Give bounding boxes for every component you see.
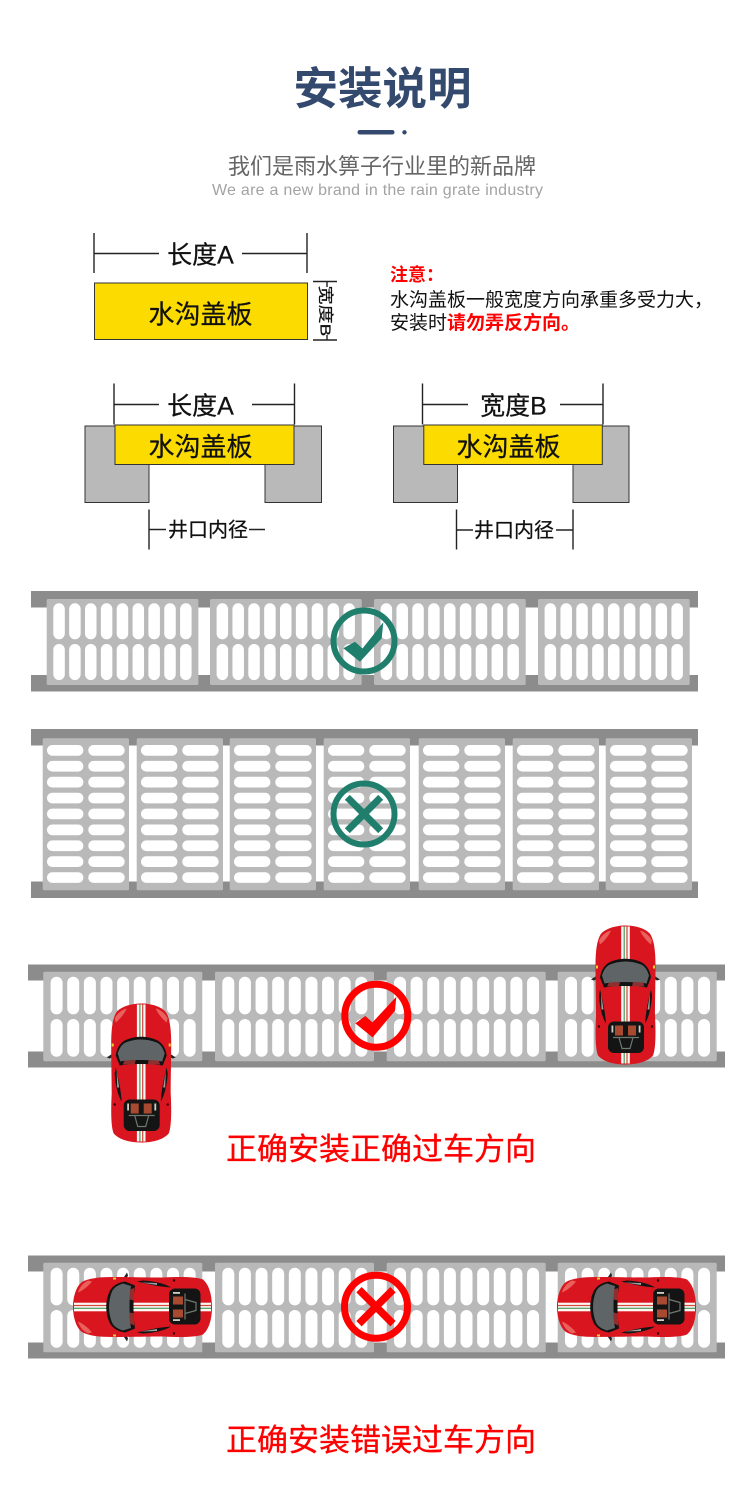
icon: red check <box>345 984 408 1047</box>
dimension: length A: 长度A <box>167 392 234 420</box>
dimension: length A <box>94 233 307 273</box>
cover plate <box>424 425 602 464</box>
car: right sideways <box>557 1272 696 1342</box>
note text <box>390 264 713 334</box>
cover plate: 水沟盖板 <box>148 432 253 462</box>
curb left <box>394 426 458 502</box>
dimension: width B: 宽度B <box>317 286 335 336</box>
grate row: correct driving direction <box>28 926 725 1142</box>
dimension: length A <box>114 384 294 424</box>
icon: green check <box>334 610 394 672</box>
car: left sideways <box>73 1272 212 1342</box>
caption: correct direction: 正确安装正确过车方向 <box>226 1132 536 1167</box>
icon: green cross <box>334 784 394 844</box>
caption: wrong direction: 正确安装错误过车方向 <box>226 1423 536 1458</box>
dimension: width B <box>422 384 603 424</box>
dimension: length A: 长度A <box>167 242 234 270</box>
icon: red cross <box>344 1275 408 1338</box>
cover plate: 水沟盖板 <box>148 300 253 330</box>
note text: 水沟盖板一般宽度方向承重多受力大， <box>390 289 713 311</box>
subtitle english: We are a new brand in the rain grate industry <box>212 182 543 199</box>
subtitle chinese: 我们是雨水箅子行业里的新品牌 <box>228 154 536 179</box>
cover plate: 水沟盖板 <box>456 432 561 462</box>
cover plate <box>94 283 308 340</box>
title: 安装说明 <box>293 65 472 114</box>
diagram: cover plate dimensions <box>94 233 337 340</box>
dimension: opening inner diameter <box>456 510 573 550</box>
diagram: installed along width B <box>394 384 629 550</box>
grate row: wrong orientation <box>31 729 698 898</box>
note text: 注意： <box>390 264 444 285</box>
diagram: installed along length A <box>85 384 322 550</box>
dimension: opening inner diameter <box>149 510 265 550</box>
dimension: opening inner diameter: 井口内径 <box>168 518 248 542</box>
dimension: width B <box>313 282 337 340</box>
grate row: wrong driving direction <box>28 1256 725 1358</box>
grate row: correct orientation <box>31 591 698 692</box>
car: left <box>107 1004 176 1142</box>
dimension: width B: 宽度B <box>480 392 547 420</box>
cover plate <box>115 425 294 464</box>
curb right <box>573 426 629 502</box>
title underline accent <box>358 130 407 134</box>
dimension: opening inner diameter: 井口内径 <box>474 519 554 542</box>
car: right <box>591 926 660 1064</box>
curb right <box>265 426 322 502</box>
curb left <box>85 426 149 502</box>
note text: 安装时请勿弄反方向。 <box>390 311 580 334</box>
